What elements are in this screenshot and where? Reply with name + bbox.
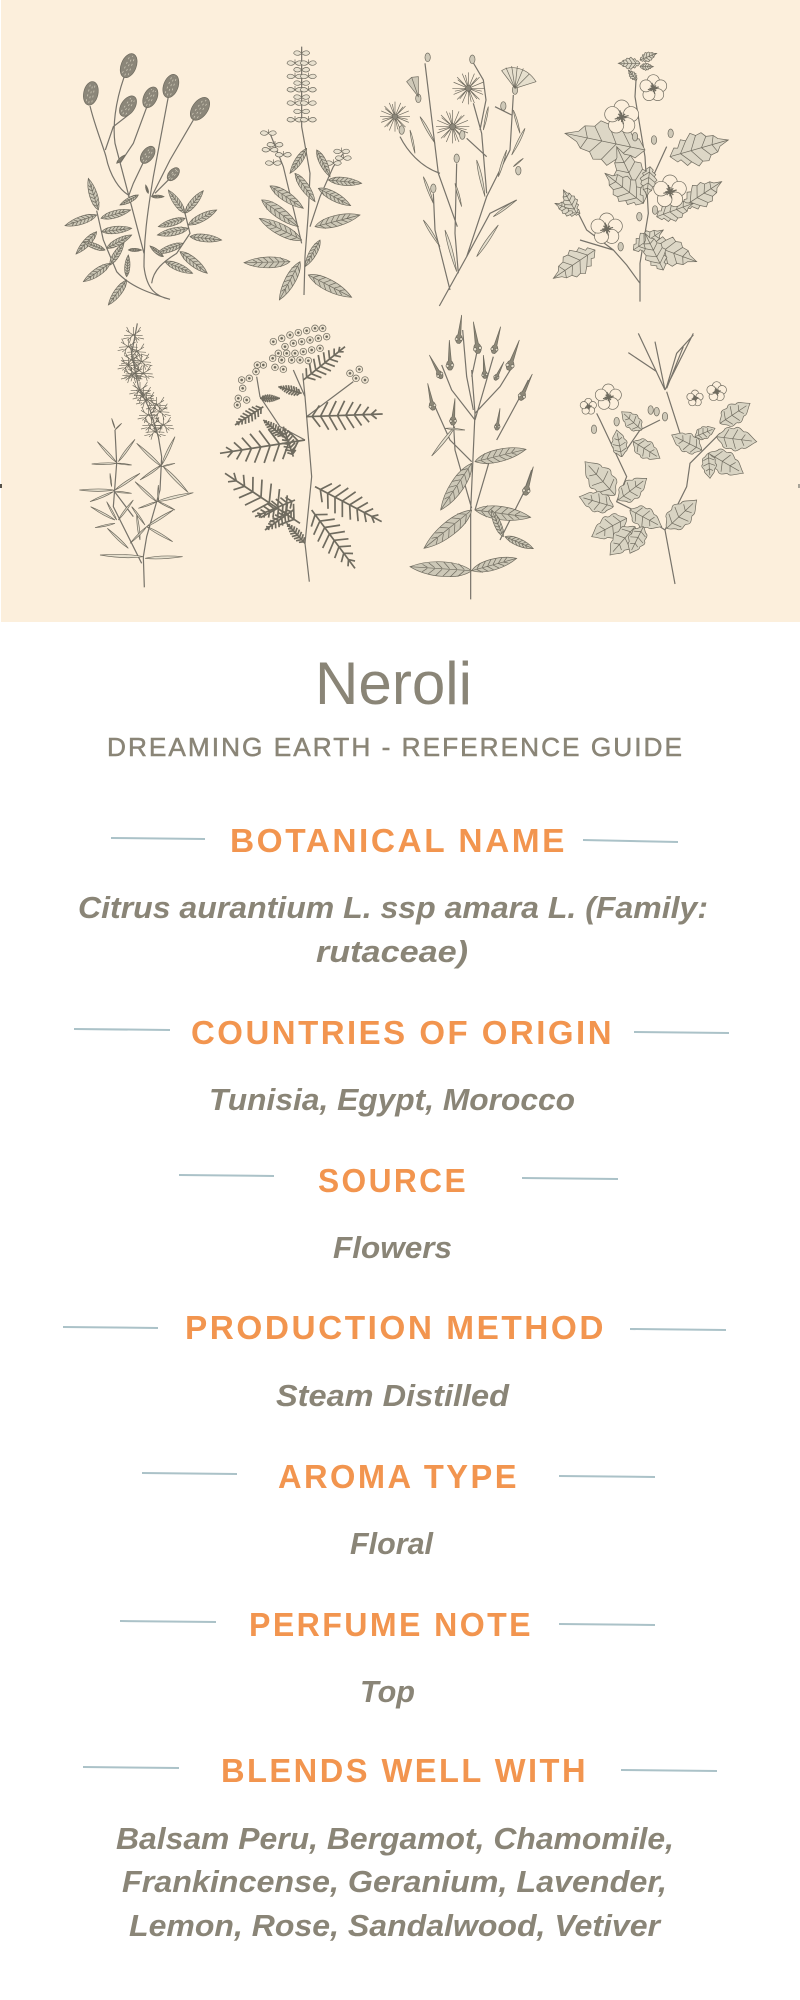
title: Neroli <box>315 650 472 717</box>
illustration: mallow with open flowers <box>545 49 733 302</box>
section: source <box>179 1162 618 1265</box>
panel: botanical illustrations <box>0 0 800 622</box>
illustration: celandine with lobed leaves <box>575 333 758 584</box>
heading: PRODUCTION METHOD <box>185 1309 606 1346</box>
value text: rutaceae) <box>316 934 468 969</box>
heading: BOTANICAL NAME <box>230 822 567 859</box>
section: production method <box>63 1309 726 1413</box>
illustration: cornflower <box>380 53 536 306</box>
section: perfume note <box>120 1606 655 1709</box>
value text: Balsam Peru, Bergamot, Chamomile, <box>116 1821 674 1856</box>
value text: Frankincense, Geranium, Lavender, <box>122 1864 667 1899</box>
section: blends well with <box>83 1752 717 1943</box>
heading: BLENDS WELL WITH <box>221 1752 588 1789</box>
illustration: sage with flower spike <box>244 47 362 303</box>
value text: Top <box>360 1674 415 1709</box>
illustration: burnet with oval flower heads <box>64 51 222 307</box>
value text: Flowers <box>333 1230 452 1265</box>
illustration: verbena with pointed spikes <box>410 315 537 599</box>
subtitle: DREAMING EARTH - REFERENCE GUIDE <box>107 732 684 762</box>
value text: Tunisia, Egypt, Morocco <box>209 1082 575 1117</box>
illustration: hyssop with narrow leaves <box>79 323 194 587</box>
value text: Floral <box>350 1526 434 1561</box>
section: botanical name <box>78 822 708 969</box>
heading: COUNTRIES OF ORIGIN <box>191 1014 614 1051</box>
value text: Steam Distilled <box>276 1378 510 1413</box>
heading: AROMA TYPE <box>278 1458 519 1495</box>
value text: Citrus aurantium L. ssp amara L. (Family: <box>78 890 708 925</box>
heading: PERFUME NOTE <box>249 1606 533 1643</box>
section: aroma type <box>142 1458 655 1561</box>
illustration: tansy with feathery leaves <box>215 325 388 582</box>
value text: Lemon, Rose, Sandalwood, Vetiver <box>129 1908 662 1943</box>
section: countries of origin <box>74 1014 729 1117</box>
heading: SOURCE <box>318 1162 468 1199</box>
